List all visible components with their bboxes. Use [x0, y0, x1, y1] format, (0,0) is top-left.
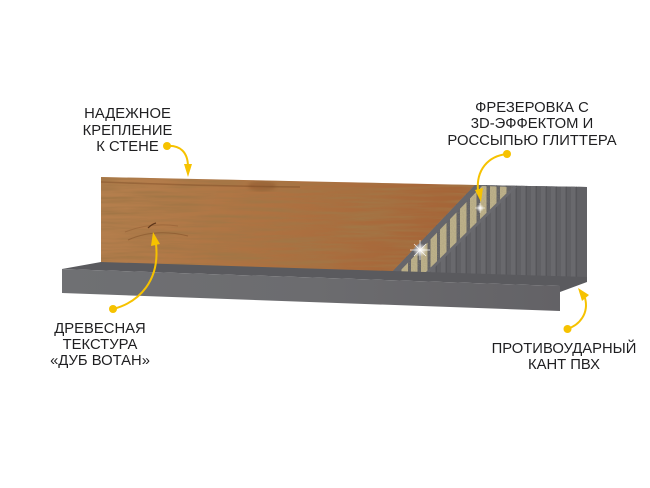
grey milled panel with vertical grooves — [393, 185, 587, 277]
sparkle: upper — [475, 203, 485, 213]
heading: wood texture: ДРЕВЕСНАЯ — [54, 321, 146, 337]
arrow: milling — [475, 150, 511, 202]
heading: PVC edge: ПРОТИВОУДАРНЫЙ — [492, 339, 636, 357]
heading: wall mount: К СТЕНЕ — [96, 139, 159, 155]
heading: wall mount: НАДЕЖНОЕ — [84, 106, 171, 122]
glitter stripes — [401, 186, 512, 272]
shelf front edge — [62, 269, 560, 311]
arrow: PVC edge — [564, 288, 589, 333]
callout: wood texture — [50, 232, 160, 369]
callout: milling with glitter — [447, 100, 617, 202]
callout: wall mount — [83, 106, 192, 177]
heading: PVC edge: КАНТ ПВХ — [528, 357, 600, 373]
shelf top surface — [62, 262, 587, 292]
heading: milling: ФРЕЗЕРОВКА С — [475, 100, 589, 116]
heading: milling: 3D-ЭФФЕКТОМ И — [471, 116, 593, 132]
heading: wood texture: ТЕКСТУРА — [63, 337, 137, 353]
heading: wood texture: «ДУБ ВОТАН» — [50, 353, 150, 369]
wood back panel — [101, 177, 475, 273]
heading: milling: РОССЫПЬЮ ГЛИТТЕРА — [447, 133, 617, 149]
shelf illustration — [62, 177, 590, 311]
sparkle: lower — [410, 240, 430, 260]
arrow: wood texture — [109, 232, 160, 313]
heading: wall mount: КРЕПЛЕНИЕ — [83, 123, 173, 139]
arrow: wall mount — [163, 142, 192, 177]
callout: PVC edge — [492, 288, 636, 373]
